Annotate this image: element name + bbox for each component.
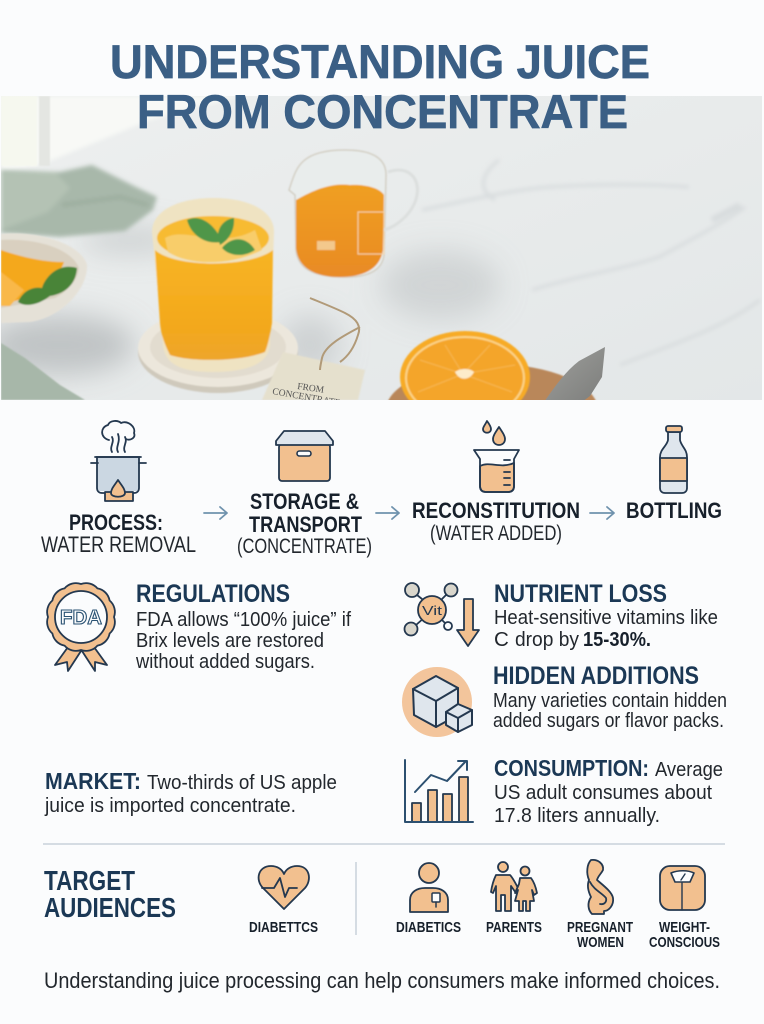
text: regulations body: without added sugars.: [135, 650, 315, 673]
heading: target audiences: TARGET: [44, 865, 135, 896]
icon: box: [276, 431, 333, 481]
text: consumption: Average: [655, 758, 723, 781]
title: FROM CONCENTRATE: [137, 85, 628, 138]
arrow: [590, 507, 614, 519]
green napkin: [1, 165, 157, 237]
text: hidden additions body: [493, 690, 727, 732]
marble counter: [1, 96, 762, 400]
process step 3: reconstitution: [412, 421, 580, 545]
audience: heart: [249, 866, 318, 936]
audience: parents: [486, 862, 542, 936]
panel: nutrient loss: [404, 580, 718, 651]
paper tag with string: CONCENTRATE: [271, 387, 341, 409]
process step 2: storage and transport: [237, 431, 372, 558]
title: [110, 35, 650, 138]
text: consumption: 17.8 liters annually.: [494, 804, 660, 827]
text: consumption: US adult consumes about: [494, 781, 712, 804]
icon: FDA rosette: [47, 583, 115, 671]
audience: pregnant women: PREGNANT: [567, 919, 633, 936]
audience: diabetics: [396, 863, 461, 936]
wooden board: [388, 366, 596, 400]
icon: FDA rosette: FDA: [60, 607, 102, 629]
icon: vitamin molecule and down arrow: Vit: [422, 603, 443, 618]
audience: weight-conscious: CONSCIOUS: [649, 934, 720, 951]
panel: consumption: [405, 755, 723, 827]
icon: beaker with drops: [474, 421, 519, 492]
arrow: [204, 507, 227, 519]
text block: market: juice is imported concentrate.: [44, 794, 296, 817]
process step 2: storage and transport: (CONCENTRATE): [237, 535, 372, 558]
icon: sugar cubes: [402, 667, 472, 737]
heading: target audiences: [44, 865, 176, 923]
icon: vitamin molecule and down arrow: [404, 583, 479, 646]
text: consumption: [494, 755, 723, 827]
process step 4: bottling: [626, 426, 722, 523]
measuring jug: [289, 150, 417, 277]
process step 2: storage and transport: TRANSPORT: [249, 512, 362, 537]
coaster: [138, 320, 298, 394]
orange half: [398, 330, 531, 400]
text: hidden additions body: Many varieties contain hidden: [493, 690, 727, 712]
process step 1: water removal: [41, 421, 196, 557]
paper tag with string: FROM: [297, 382, 325, 396]
window light: [1, 96, 216, 168]
icon: bottle: [660, 426, 687, 493]
text block: market: Two-thirds of US apple: [147, 771, 337, 794]
text: consumption: CONSUMPTION:: [494, 755, 649, 781]
text: regulations body: FDA allows “100% juice” if: [136, 608, 351, 631]
lower napkin: [1, 343, 85, 400]
process step 1: water removal: WATER REMOVAL: [41, 532, 196, 557]
bowl with orange: [1, 233, 87, 323]
text block: market: MARKET:: [45, 768, 141, 794]
audience: diabetics: DIABETICS: [396, 919, 461, 936]
text: regulations body: Brix levels are restored: [136, 629, 324, 652]
heading: target audiences: AUDIENCES: [44, 892, 176, 923]
panel: hidden additions: [402, 662, 727, 737]
text: nutrient loss body: C: [494, 628, 509, 651]
panel: regulations: [47, 580, 351, 673]
audience: pregnant women: [567, 860, 633, 951]
label: process: PROCESS:: [69, 510, 163, 535]
audience: weight-conscious: WEIGHT-: [659, 919, 710, 936]
audience: parents: PARENTS: [486, 919, 542, 936]
label: bottling: BOTTLING: [626, 498, 722, 523]
text: nutrient loss body: 15-30%.: [583, 628, 651, 651]
text: regulations body: [135, 608, 351, 673]
icon: boiling pot: [91, 421, 146, 501]
audience: pregnant women: WOMEN: [577, 934, 624, 951]
knife blade: [544, 347, 605, 402]
process step 3: reconstitution: (WATER ADDED): [430, 522, 562, 545]
audience: heart: DIABETTCS: [249, 919, 318, 936]
text: nutrient loss body: drop by: [515, 628, 580, 651]
label: storage: STORAGE &: [250, 489, 359, 514]
hero photo: juice on marble counter: [0, 96, 762, 456]
text: nutrient loss body: [494, 606, 718, 651]
arrow: [376, 507, 399, 519]
label: reconstitution: RECONSTITUTION: [412, 498, 580, 523]
panel: target audiences: [44, 860, 720, 951]
heading: nutrient loss: NUTRIENT LOSS: [494, 580, 667, 608]
icon: rising bar chart: [405, 760, 473, 822]
shadows: [0, 228, 500, 375]
text: nutrient loss body: Heat-sensitive vitamins like: [494, 606, 718, 629]
heading: hidden additions: HIDDEN ADDITIONS: [493, 662, 699, 690]
juice glass: [152, 198, 274, 372]
text: hidden additions body: added sugars or flavor packs.: [493, 710, 724, 732]
marble veins: [425, 162, 743, 274]
heading: regulations: REGULATIONS: [136, 580, 290, 608]
text block: market: [44, 768, 337, 817]
paper tag with string: [262, 298, 365, 409]
audience: weight-conscious: [649, 866, 720, 951]
title: UNDERSTANDING JUICE: [110, 35, 650, 88]
